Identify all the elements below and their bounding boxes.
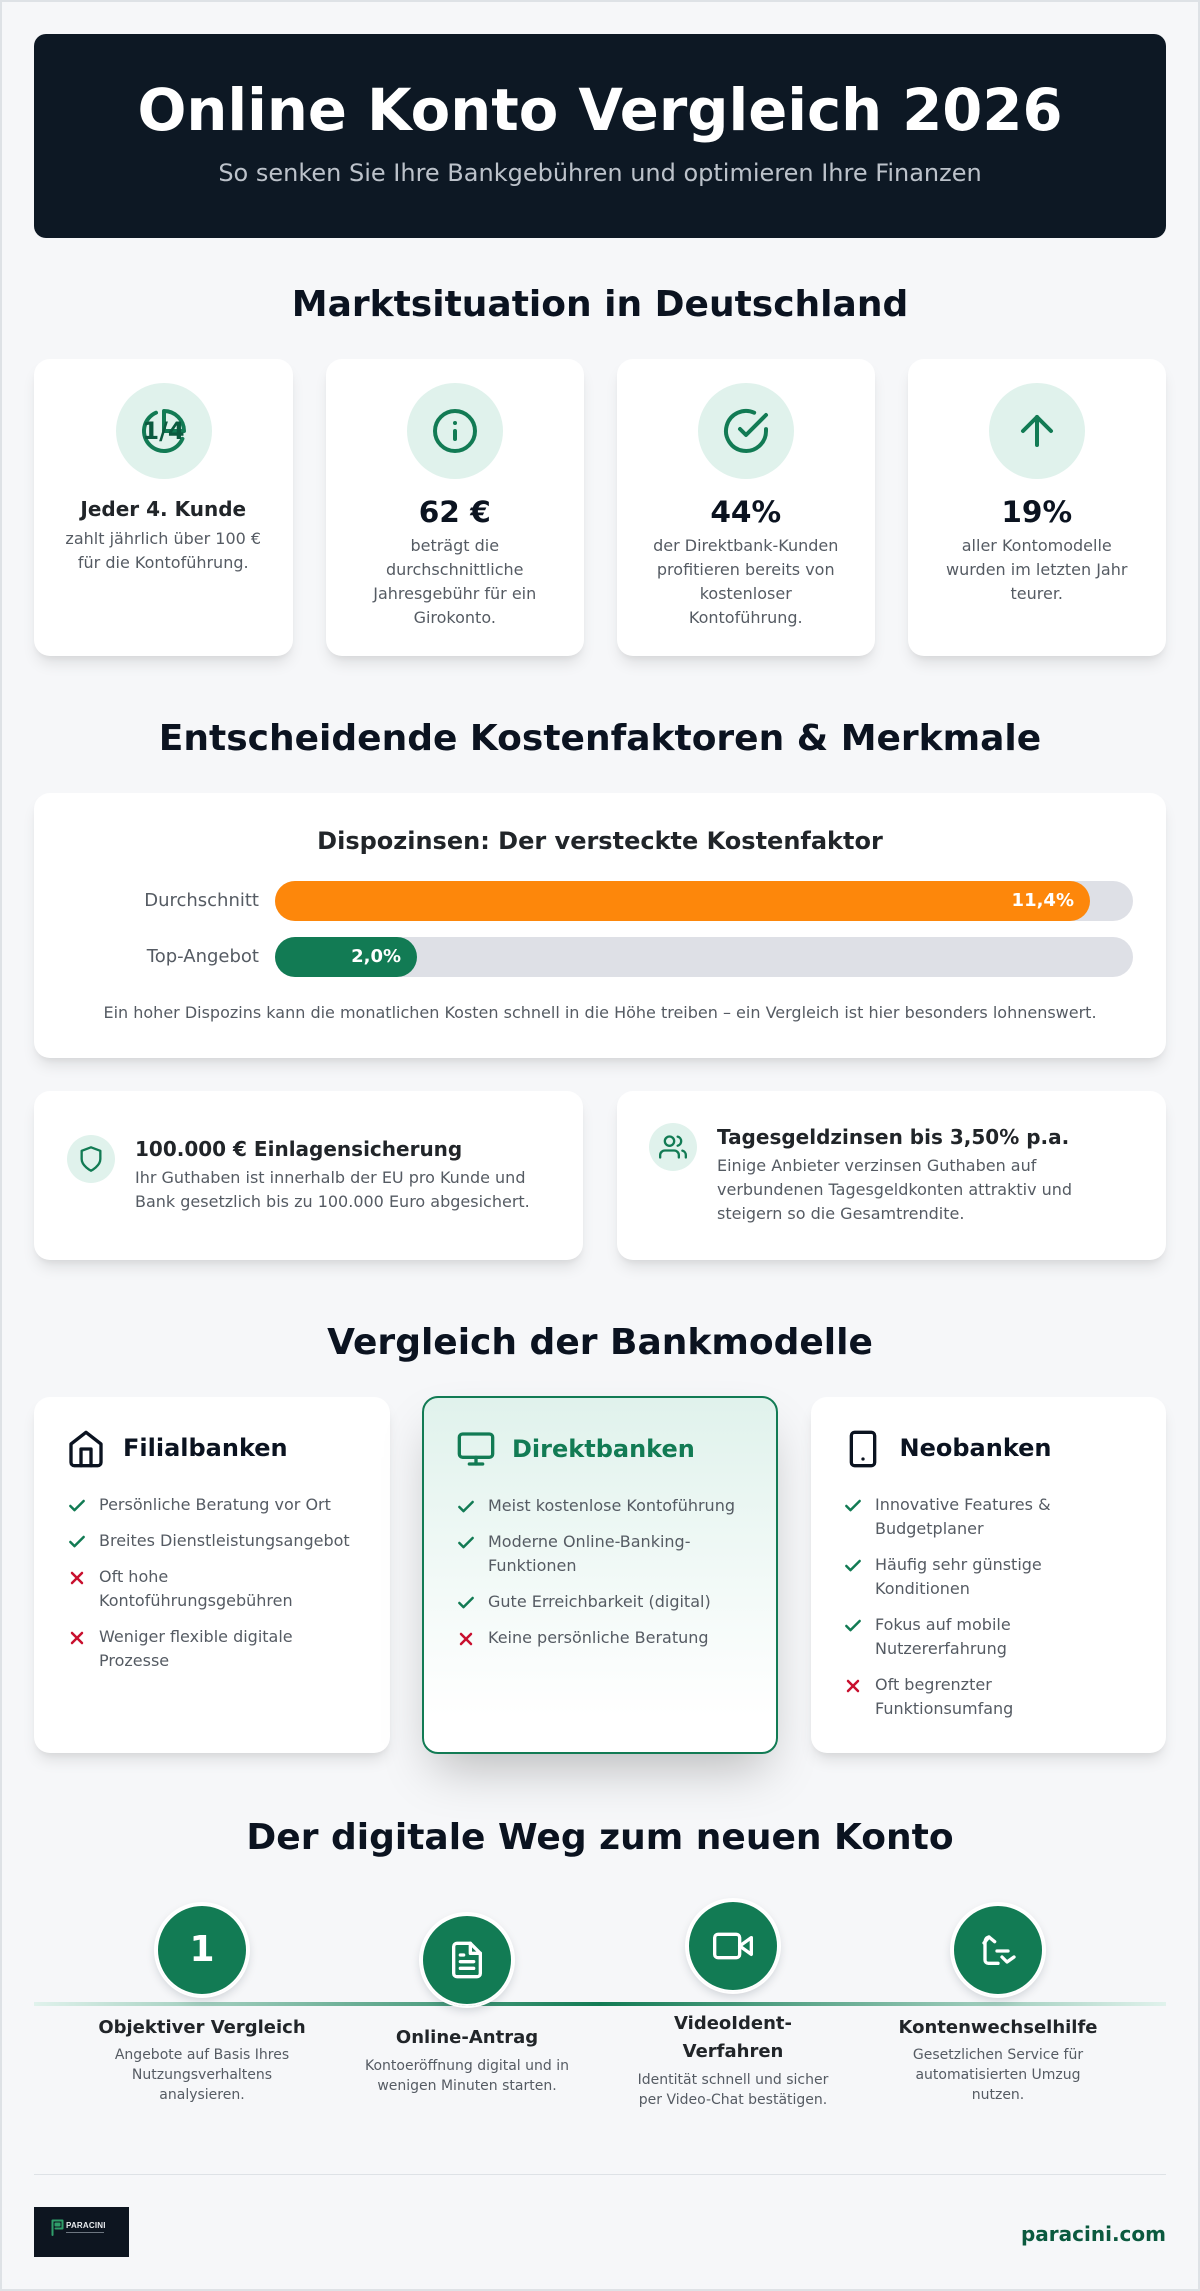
feature text: Ihr Guthaben ist innerhalb der EU pro Kunde und	[135, 1168, 525, 1187]
bar fill	[275, 881, 1090, 921]
model card: Neobanken	[810, 1397, 1166, 1753]
item: Meist kostenlose Kontoführung	[488, 1496, 735, 1515]
step text	[365, 2058, 569, 2094]
step badge 1	[156, 1904, 248, 1996]
stat description: wurden im letzten Jahr	[946, 560, 1127, 579]
step text: nutzen.	[972, 2087, 1024, 2103]
chart note: Ein hoher Dispozins kann die monatlichen Kosten schnell in die Höhe treiben – ein Vergleich ist hier besonders lohnenswert.	[103, 1003, 1097, 1022]
bar fill	[275, 937, 417, 977]
item: Funktionsumfang	[875, 1699, 1013, 1718]
check	[69, 1536, 85, 1548]
step text: Identität schnell und sicher	[638, 2072, 828, 2088]
step 1: Objektiver Vergleich	[98, 1902, 306, 2103]
step 4: Kontenwechselhilfe	[898, 1902, 1098, 2103]
item	[875, 1495, 1051, 1538]
check	[845, 1620, 861, 1632]
stat description	[653, 536, 838, 627]
feature card: Einlagensicherung	[34, 1091, 583, 1260]
cross	[846, 1680, 860, 1692]
step title: VideoIdent-	[674, 2013, 792, 2034]
step title: Verfahren	[683, 2041, 783, 2062]
icon: arrow up	[989, 383, 1085, 479]
step badge 1: 1	[189, 1929, 215, 1970]
stat description: Jahresgebühr für ein	[373, 584, 536, 603]
item: Nutzererfahrung	[875, 1639, 1007, 1658]
step 3: VideoIdent-Verfahren	[638, 1898, 828, 2108]
logo mark	[51, 2219, 64, 2236]
step text	[638, 2072, 828, 2108]
step text	[913, 2047, 1084, 2103]
bar fill: 11,4%	[1012, 890, 1074, 911]
heading: digitaler Weg: Der digitale Weg zum neuen Konto	[246, 1817, 954, 1858]
stat description: aller Kontomodelle	[962, 536, 1112, 555]
step title: Objektiver Vergleich	[98, 2017, 306, 2038]
footer logo	[34, 2207, 129, 2257]
panel: Dispozinsen bar chart	[34, 793, 1166, 1058]
stat description: beträgt die	[410, 536, 499, 555]
feature text: steigern so die Gesamtrendite.	[717, 1204, 964, 1223]
icon: smartphone	[850, 1430, 876, 1468]
check	[458, 1536, 474, 1548]
footer site link: paracini.com	[1021, 2222, 1166, 2246]
logo wordmark: PARACINI	[66, 2221, 106, 2230]
stat value: 19%	[1001, 495, 1072, 529]
item: Persönliche Beratung vor Ort	[99, 1495, 331, 1514]
bar label: Durchschnitt: Durchschnitt	[144, 890, 259, 911]
feature text	[135, 1168, 530, 1211]
step badge: document icon	[421, 1914, 513, 2006]
stat description	[372, 536, 536, 627]
step badge: video icon	[687, 1900, 779, 1992]
heading: Bankmodelle: Vergleich der Bankmodelle	[327, 1322, 873, 1363]
item	[99, 1627, 293, 1670]
item: Innovative Features &	[875, 1495, 1051, 1514]
icon: pie chart with 1/4: 1/4	[142, 417, 185, 445]
item: Moderne Online-Banking-	[488, 1532, 690, 1551]
check	[458, 1596, 474, 1608]
bar: Durchschnitt 11,4%	[275, 881, 1133, 921]
step text: Kontoeröffnung digital und in	[365, 2058, 569, 2074]
icon: pie chart with 1/4	[116, 383, 212, 479]
icon: check circle	[698, 383, 794, 479]
step 2: Online-Antrag	[365, 1912, 569, 2094]
feature text	[717, 1156, 1072, 1223]
step text: per Video-Chat bestätigen.	[639, 2092, 827, 2108]
chart title: Dispozinsen: Der versteckte Kostenfaktor	[317, 827, 883, 855]
item	[875, 1555, 1042, 1598]
item: Oft begrenzter	[875, 1675, 992, 1694]
step badge: switch icon	[952, 1904, 1044, 1996]
stat description: kostenloser	[700, 584, 792, 603]
feature text: verbundenen Tagesgeldkonten attraktiv und	[717, 1180, 1072, 1199]
step text: automatisierten Umzug	[915, 2067, 1081, 2083]
step title	[674, 2013, 792, 2062]
model title: Filialbanken	[123, 1434, 288, 1462]
icon: house	[69, 1430, 103, 1468]
icon: monitor	[458, 1432, 494, 1466]
step text: analysieren.	[159, 2087, 245, 2103]
item: Häufig sehr günstige	[875, 1555, 1042, 1574]
stat card: 62 €	[326, 359, 584, 656]
stat description: für die Kontoführung.	[78, 553, 249, 572]
item: Oft hohe	[99, 1567, 168, 1586]
item: Kontoführungsgebühren	[99, 1591, 293, 1610]
step text: Angebote auf Basis Ihres	[115, 2047, 289, 2063]
title: Online Konto Vergleich 2026	[137, 77, 1063, 144]
stat description: der Direktbank-Kunden	[653, 536, 838, 555]
check	[845, 1560, 861, 1572]
step text: wenigen Minuten starten.	[377, 2078, 557, 2094]
feature title: Tagesgeldzinsen bis 3,50% p.a.	[717, 1125, 1069, 1149]
check	[458, 1500, 474, 1512]
item	[99, 1567, 293, 1610]
item: Prozesse	[99, 1651, 169, 1670]
stat card: Jeder 4. Kunde	[34, 359, 292, 656]
feature text: Bank gesetzlich bis zu 100.000 Euro abgesichert.	[135, 1192, 530, 1211]
logo tagline	[66, 2232, 104, 2233]
check	[845, 1500, 861, 1512]
step text: Nutzungsverhaltens	[132, 2067, 272, 2083]
icon: info	[407, 383, 503, 479]
model card: Direktbanken (highlighted)	[422, 1396, 778, 1754]
feature title: 100.000 € Einlagensicherung	[135, 1137, 462, 1161]
model card: Filialbanken	[34, 1397, 390, 1753]
item: Gute Erreichbarkeit (digital)	[488, 1592, 711, 1611]
cross	[70, 1572, 84, 1584]
stat description: teurer.	[1010, 584, 1063, 603]
bar label: Top-Angebot: Top-Angebot	[147, 946, 259, 967]
subtitle: So senken Sie Ihre Bankgebühren und optimieren Ihre Finanzen	[218, 159, 982, 187]
item: Weniger flexible digitale	[99, 1627, 293, 1646]
cross	[460, 1632, 472, 1646]
item: Konditionen	[875, 1579, 970, 1598]
stat description: zahlt jährlich über 100 €	[65, 529, 261, 548]
item: Breites Dienstleistungsangebot	[99, 1531, 350, 1550]
icon: shield	[67, 1135, 115, 1183]
stat card: 19%	[908, 359, 1166, 656]
item: Keine persönliche Beratung	[488, 1628, 709, 1647]
timeline line	[34, 2002, 1166, 2006]
feature card: Tagesgeldzinsen	[617, 1091, 1166, 1260]
pros and cons list	[458, 1496, 735, 1647]
model title: Direktbanken	[512, 1435, 695, 1463]
model title: Neobanken	[900, 1434, 1052, 1462]
cross	[70, 1632, 84, 1644]
item: Budgetplaner	[875, 1519, 984, 1538]
step text	[115, 2047, 289, 2103]
bar fill: 2,0%	[351, 946, 401, 967]
footer rule	[34, 2174, 1166, 2175]
stat card: 44%	[616, 359, 875, 656]
step text: Gesetzlichen Service für	[913, 2047, 1083, 2063]
item: Fokus auf mobile	[875, 1615, 1011, 1634]
stat headline: Jeder 4. Kunde	[80, 497, 246, 521]
item	[875, 1615, 1011, 1658]
icon: users	[649, 1123, 697, 1171]
item	[488, 1532, 690, 1575]
stat description: durchschnittliche	[386, 560, 524, 579]
header banner	[34, 34, 1166, 238]
pros and cons list	[69, 1495, 350, 1670]
pros and cons list	[845, 1495, 1051, 1718]
item: Funktionen	[488, 1556, 577, 1575]
stat value: 62 €	[419, 495, 491, 529]
feature text: Einige Anbieter verzinsen Guthaben auf	[717, 1156, 1036, 1175]
step title: Online-Antrag	[396, 2027, 538, 2048]
heading: Marktsituation: Marktsituation in Deutschland	[292, 284, 908, 325]
stat description: Girokonto.	[414, 608, 496, 627]
heading: Kostenfaktoren: Entscheidende Kostenfaktoren & Merkmale	[159, 718, 1041, 759]
stat value: 44%	[710, 495, 781, 529]
item	[875, 1675, 1013, 1718]
step title: Kontenwechselhilfe	[898, 2017, 1098, 2038]
stat description: Kontoführung.	[689, 608, 803, 627]
stat description: profitieren bereits von	[657, 560, 835, 579]
bar: Top-Angebot 2,0%	[275, 937, 1133, 977]
stat description	[65, 529, 261, 572]
check	[69, 1500, 85, 1512]
stat description	[946, 536, 1128, 603]
